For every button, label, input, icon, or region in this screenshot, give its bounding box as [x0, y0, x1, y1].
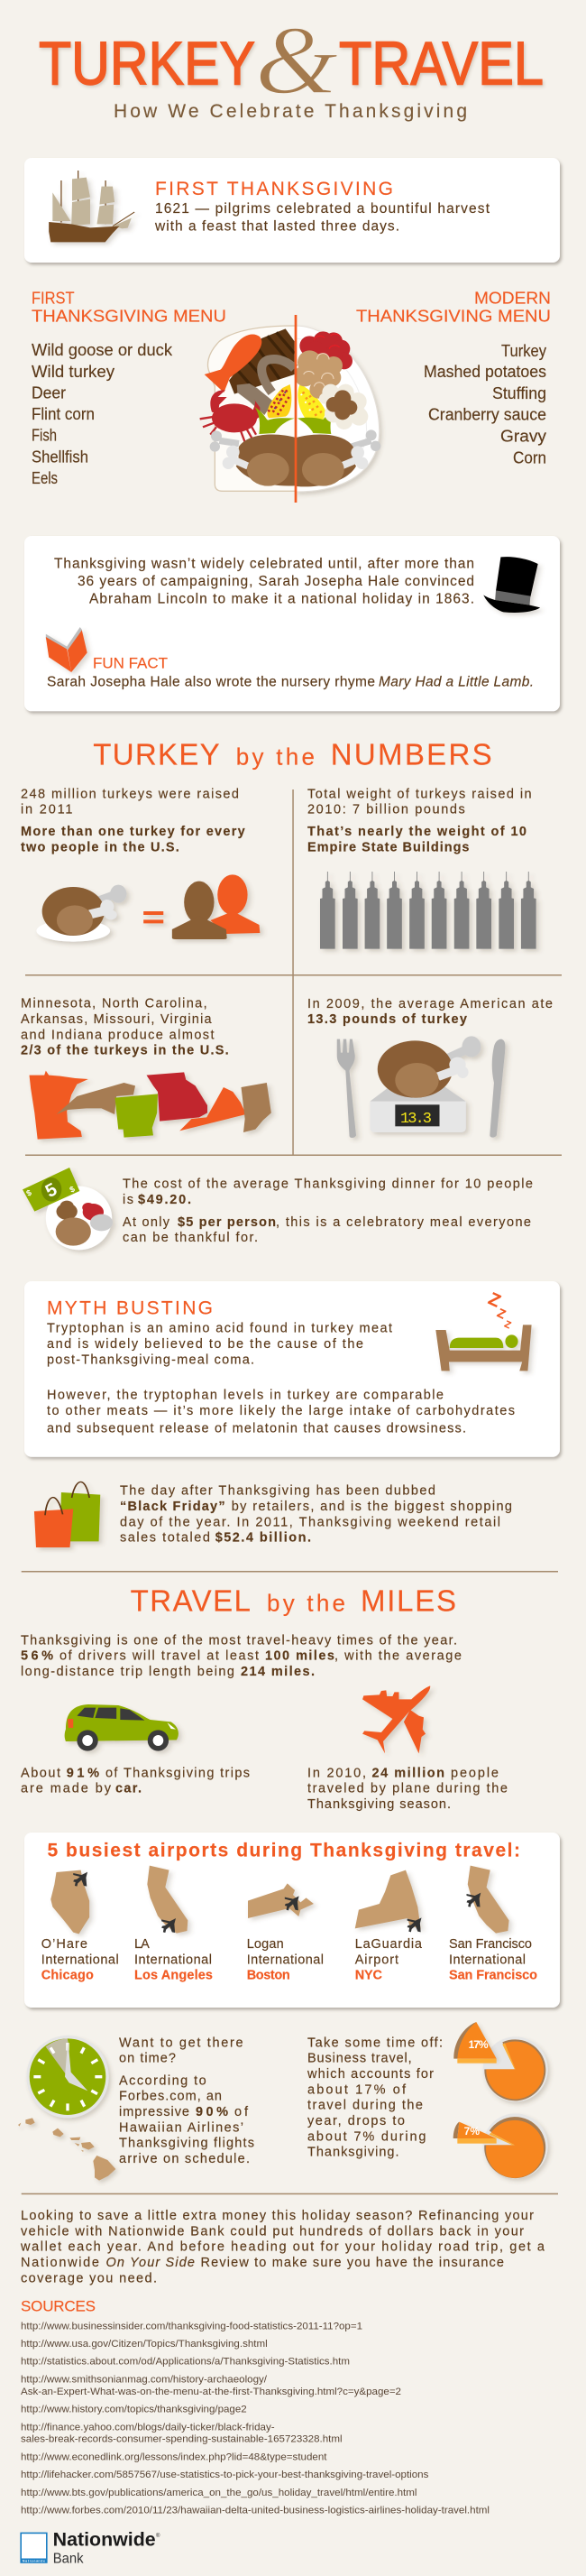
text block: with a feast that lasted three days.	[154, 219, 399, 235]
text block: dinner cost: The cost of the average Thanksgiving dinner for 10 people	[123, 1177, 533, 1192]
text block: nationwide pitch: Nationwide	[21, 2256, 99, 2270]
list: first menu: Eels	[32, 469, 58, 487]
list: modern menu: Stuffing	[492, 384, 546, 402]
stat: turkeys raised	[21, 787, 245, 854]
chart: pie with 17% slice	[453, 2022, 548, 2101]
stat: turkey states	[21, 997, 229, 1058]
text block: on-time flights: of	[234, 2105, 249, 2119]
text block: 1621 — pilgrims celebrated a bountiful harvest	[155, 201, 490, 217]
text block: Sarah Josepha Hale also wrote the nursery rhyme	[47, 675, 375, 690]
text block: black friday: by retailers, and is the biggest shopping	[232, 1500, 512, 1514]
airport: logan	[247, 1937, 324, 1983]
icon: sleeping z's: Z	[485, 1289, 503, 1312]
stat: turkey states: and Indiana produce almost	[21, 1028, 215, 1042]
icon: five dollar bill on plate: $	[24, 1188, 33, 1198]
stat: plane trips: 24 million	[371, 1766, 444, 1780]
list: first menu: Flint corn	[32, 405, 95, 423]
section heading: turkey by the numbers: NUMBERS	[331, 738, 492, 771]
section heading: turkey by the numbers: by the	[236, 743, 315, 771]
list: first menu: Deer	[32, 384, 66, 402]
section heading: turkey by the numbers: TURKEY	[93, 738, 220, 771]
chart: pie with 7% slice	[453, 2113, 548, 2178]
title	[39, 7, 544, 115]
icon: bed	[435, 1325, 532, 1371]
text block: on-time flights: Hawaiian Airlines’	[119, 2120, 243, 2135]
airport: laguardia: NYC	[355, 1969, 383, 1983]
text block: travel intro: Thanksgiving is one of the most travel-heavy times of the year.	[21, 1633, 457, 1648]
list: source urls: http://lifehacker.com/5857567/use-statistics-to-pick-your-best-thanksgiving-travel-options	[21, 2470, 429, 2480]
text block: nationwide pitch: wallet each year. And before heading out for your holiday road trip, get a	[20, 2240, 545, 2255]
logo: nationwide bank: Nationwide	[23, 2560, 45, 2563]
text block: However, the tryptophan levels in turkey are comparable	[47, 1389, 444, 1403]
text block: travel intro: 56%	[21, 1649, 53, 1664]
chart: pie with 7% slice: 7%	[464, 2125, 480, 2137]
text block: on-time flights: on time?	[119, 2052, 176, 2066]
airport: o'hare: Chicago	[41, 1969, 94, 1983]
text block: business travel: Business travel,	[307, 2052, 412, 2066]
text block: black friday: $52.4 billion.	[215, 1531, 311, 1546]
heading: 5 busiest airports during Thanksgiving travel:	[47, 1840, 520, 1860]
list: modern menu: Gravy	[500, 427, 546, 445]
title: &	[255, 7, 338, 115]
airport: logan: Logan	[247, 1937, 284, 1952]
text block: business travel: Thanksgiving.	[307, 2146, 398, 2160]
text block: dinner cost: is	[123, 1193, 133, 1207]
text block: business travel	[307, 2036, 443, 2160]
heading: FIRST THANKSGIVING	[155, 179, 393, 199]
stat: total weight: Empire State Buildings	[307, 840, 469, 854]
airport: o'hare	[41, 1937, 119, 1983]
list: modern menu: Cranberry sauce	[428, 406, 546, 424]
text block: business travel: about 7% during	[307, 2129, 426, 2144]
text block: on-time flights: arrive on schedule.	[119, 2152, 250, 2166]
airport: san francisco: San Francisco	[449, 1937, 532, 1952]
icon: shopping bags	[34, 1482, 100, 1547]
panel: busiest airports	[24, 1833, 560, 2008]
airport: laguardia: Airport	[355, 1953, 398, 1967]
icon: fork, knife, turkey on scale	[337, 1036, 505, 1138]
text block: travel intro: of drivers will travel at least	[60, 1649, 259, 1664]
icon: six states	[30, 1071, 271, 1140]
airport: san francisco: International	[449, 1953, 526, 1967]
logo: nationwide bank: ®	[156, 2533, 160, 2539]
stat: total weight: That’s nearly the weight of 10	[307, 825, 526, 839]
chart: pie with 17% slice: 17%	[469, 2038, 489, 2051]
text block: black friday: day of the year. In 2011, Thanksgiving weekend retail	[120, 1515, 500, 1529]
stat: turkeys raised: two people in the U.S.	[21, 840, 179, 854]
text block: dinner cost: , this is a celebratory meal everyone	[276, 1215, 531, 1230]
list: source urls: http://www.bts.gov/publications/america_on_the_go/us_holiday_travel/html/entire.html	[21, 2488, 417, 2498]
airport: logan: International	[247, 1953, 324, 1967]
list: first menu: Wild turkey	[32, 363, 114, 381]
icon: sleeping z's: Z	[495, 1306, 508, 1322]
section heading: travel by the miles: MILES	[361, 1584, 456, 1618]
text block: nationwide pitch: Review to make sure you have the insurance	[200, 2256, 504, 2270]
section heading: travel by the miles: TRAVEL	[131, 1584, 251, 1618]
stat: plane trips: people	[451, 1766, 499, 1780]
icon: state maps with planes	[50, 1866, 509, 1934]
text block: post-Thanksgiving-meal coma.	[47, 1353, 254, 1367]
text block: nationwide pitch: vehicle with Nationwide Bank could put hundreds of dollars back in your	[21, 2224, 524, 2239]
subtitle: How We Celebrate Thanksgiving	[114, 101, 467, 122]
illustration: plate comparison	[200, 315, 380, 503]
list: source urls: http://www.econedlink.org/lessons/index.php?lid=48&type=student	[21, 2451, 326, 2462]
list: first menu	[32, 341, 173, 487]
text block: nationwide pitch: On Your Side	[106, 2256, 195, 2270]
heading: first menu: FIRST	[32, 289, 74, 308]
text block: dinner cost: $49.20.	[138, 1193, 191, 1207]
logo: nationwide bank: Nationwide	[53, 2530, 156, 2551]
list: source urls: http://statistics.about.com/od/Applications/a/Thanksgiving-Statistics.htm	[21, 2357, 350, 2368]
stat: pounds of turkey: In 2009, the average American ate	[307, 997, 553, 1011]
icon: book	[46, 627, 87, 672]
list: source urls: http://finance.yahoo.com/blogs/daily-ticker/black-friday-	[21, 2422, 275, 2433]
section heading: travel by the miles	[131, 1584, 456, 1618]
heading: modern menu	[356, 289, 551, 326]
list: source urls	[21, 2322, 490, 2516]
airport: la: International	[134, 1953, 212, 1967]
icon: car	[65, 1704, 179, 1751]
logo: nationwide bank	[21, 2530, 160, 2567]
text block: 36 years of campaigning, Sarah Josepha Hale convinced	[78, 574, 474, 589]
text block: black friday	[120, 1484, 512, 1546]
text block: travel intro	[21, 1633, 462, 1679]
text block: Mary Had a Little Lamb.	[379, 675, 534, 690]
stat: car trips: car.	[115, 1782, 142, 1796]
title: TRAVEL	[339, 29, 544, 97]
airport: laguardia	[355, 1937, 423, 1983]
stat: turkey states: 2/3 of the turkeys in the U.S.	[21, 1044, 229, 1058]
airport: o'hare: International	[41, 1953, 119, 1967]
stat: plane trips	[307, 1766, 508, 1812]
stat: turkey states: Arkansas, Missouri, Virginia	[21, 1012, 213, 1027]
list: source urls: Ask-an-Expert-What-was-on-the-menu-at-the-first-Thanksgiving.html?c=y&page=2	[21, 2387, 401, 2397]
stat: car trips: About	[21, 1766, 60, 1780]
stat: total weight	[307, 787, 532, 854]
icon: empire state buildings	[320, 872, 536, 949]
stat: car trips	[21, 1766, 250, 1796]
text block: and is widely believed to be the cause of the	[47, 1337, 363, 1352]
text block: business travel: about 17% of	[307, 2082, 407, 2097]
stat: pounds of turkey: 13.3 pounds of turkey	[307, 1012, 467, 1027]
text block: dinner cost: $5 per person	[178, 1215, 276, 1230]
text block: dinner cost	[123, 1177, 533, 1245]
text block: business travel: year, drops to	[307, 2114, 405, 2128]
list: first menu: Fish	[32, 427, 57, 445]
heading: first menu: THANKSGIVING MENU	[32, 307, 226, 326]
stat: pounds of turkey	[307, 997, 553, 1027]
text block: on-time flights: impressive	[119, 2105, 189, 2119]
airport: laguardia: LaGuardia	[355, 1937, 423, 1952]
icon: hawaii islands	[18, 2118, 115, 2181]
text block: dinner cost: can be thankful for.	[123, 1231, 258, 1245]
icon: turkey equals two people	[36, 874, 260, 942]
stat: car trips: are made by	[21, 1782, 112, 1796]
text block: travel intro: long-distance trip length being	[21, 1665, 234, 1679]
list: source urls: http://www.businessinsider.com/thanksgiving-food-statistics-2011-11?op=1	[21, 2322, 362, 2332]
text block: nationwide pitch: Looking to save a little extra money this holiday season? Refinancing your	[21, 2209, 534, 2223]
text block: black friday: The day after Thanksgiving has been dubbed	[120, 1484, 435, 1499]
text block	[154, 201, 490, 235]
title: TURKEY	[39, 29, 255, 97]
list: source urls: http://www.history.com/topics/thanksgiving/page2	[21, 2405, 247, 2415]
airport: logan: Boston	[247, 1969, 290, 1983]
text block: business travel: travel during the	[307, 2099, 423, 2113]
icon: sleeping z's	[485, 1289, 513, 1332]
text block: business travel: Take some time off:	[307, 2036, 443, 2050]
text block: black friday: “Black Friday”	[120, 1500, 225, 1514]
text block: on-time flights: Want to get there	[119, 2036, 243, 2050]
stat: turkeys raised: More than one turkey for every	[21, 825, 245, 839]
list: modern menu	[424, 342, 546, 466]
text block: travel intro: 214 miles.	[241, 1665, 315, 1679]
stat: total weight: 2010: 7 billion pounds	[307, 803, 465, 817]
panel: myth busting	[24, 1281, 560, 1457]
heading: FUN FACT	[93, 655, 168, 672]
logo: nationwide bank: Bank	[53, 2552, 84, 2567]
text block	[47, 675, 534, 690]
stat: turkey states: Minnesota, North Carolina,	[21, 997, 207, 1011]
text block: black friday: sales totaled	[120, 1531, 210, 1546]
text block: nationwide pitch	[20, 2209, 545, 2285]
text block: Abraham Lincoln to make it a national holiday in 1863.	[89, 592, 474, 607]
airport: san francisco	[449, 1937, 537, 1983]
icon: five dollar bill on plate	[23, 1168, 113, 1250]
text block: Tryptophan is an amino acid found in turkey meat	[47, 1322, 392, 1336]
heading: MYTH BUSTING	[47, 1298, 213, 1319]
list: source urls: http://www.smithsonianmag.com/history-archaeology/	[21, 2375, 268, 2386]
text block: on-time flights: Thanksgiving flights	[119, 2137, 254, 2151]
text block: travel intro: , with the average	[334, 1649, 462, 1664]
stat: turkeys raised: in 2011	[21, 803, 72, 817]
list: source urls: sales-break-records-consumer-spending-sustainable-165723328.html	[21, 2434, 343, 2445]
airport: la	[134, 1937, 213, 1983]
text block: on-time flights: 90%	[196, 2105, 228, 2119]
text block: to other meats — it’s more likely the large intake of carbohydrates	[47, 1404, 515, 1418]
heading: first menu	[32, 289, 226, 326]
text block: travel intro: 100 miles	[265, 1649, 334, 1664]
list: modern menu: Corn	[513, 448, 546, 466]
text block: on-time flights	[119, 2036, 254, 2166]
list: first menu: Shellfish	[32, 448, 88, 466]
stat: plane trips: In 2010,	[307, 1766, 366, 1780]
icon: top hat	[483, 557, 540, 613]
icon: sleeping z's: Z	[502, 1319, 513, 1332]
heading: sources: SOURCES	[21, 2298, 96, 2315]
stat: total weight: Total weight of turkeys raised in	[307, 787, 532, 801]
text block	[47, 1322, 515, 1436]
text block: nationwide pitch: coverage you need.	[21, 2271, 157, 2285]
stat: plane trips: traveled by plane during the	[307, 1782, 508, 1796]
text block	[54, 556, 474, 607]
text block: on-time flights: Forbes.com, an	[119, 2090, 222, 2104]
section heading: turkey by the numbers	[93, 738, 492, 771]
panel: first thanksgiving	[24, 158, 560, 263]
scale display value: 13.3	[400, 1111, 432, 1128]
panel: sarah josepha hale	[24, 536, 560, 711]
icon: clock	[26, 2036, 109, 2118]
text block: business travel: which accounts for	[307, 2067, 434, 2082]
stat: turkeys raised: 248 million turkeys were raised	[21, 787, 239, 801]
list: source urls: http://www.usa.gov/Citizen/Topics/Thanksgiving.shtml	[21, 2339, 268, 2350]
icon: five dollar bill on plate: $	[68, 1185, 77, 1195]
text block: Thanksgiving wasn’t widely celebrated until, after more than	[54, 556, 474, 571]
icon: ship	[49, 171, 134, 242]
text block: dinner cost: At only	[123, 1215, 170, 1230]
icon: five dollar bill on plate: 5	[42, 1179, 60, 1202]
list: first menu: Wild goose or duck	[32, 341, 173, 359]
stat: plane trips: Thanksgiving season.	[307, 1797, 451, 1812]
list: source urls: http://www.forbes.com/2010/11/23/hawaiian-delta-united-business-logistics-airlines-holiday-travel.html	[21, 2506, 490, 2516]
text block: and subsequent release of melatonin that causes drowsiness.	[47, 1422, 466, 1436]
stat: car trips: 91%	[67, 1766, 99, 1780]
icon: plane	[362, 1685, 430, 1753]
center divider	[295, 315, 297, 503]
text block: on-time flights: According to	[119, 2073, 206, 2088]
list: modern menu: Mashed potatoes	[424, 363, 546, 381]
airport: o'hare: O’Hare	[41, 1937, 87, 1952]
airport: la: Los Angeles	[134, 1969, 213, 1983]
list: modern menu: Turkey	[501, 342, 546, 360]
airport: san francisco: San Francisco	[449, 1969, 537, 1983]
heading: modern menu: MODERN	[474, 289, 551, 308]
stat: car trips: of Thanksgiving trips	[105, 1766, 250, 1780]
section heading: travel by the miles: by the	[267, 1590, 345, 1617]
airport: la: LA	[134, 1937, 150, 1952]
heading: modern menu: THANKSGIVING MENU	[356, 307, 551, 326]
